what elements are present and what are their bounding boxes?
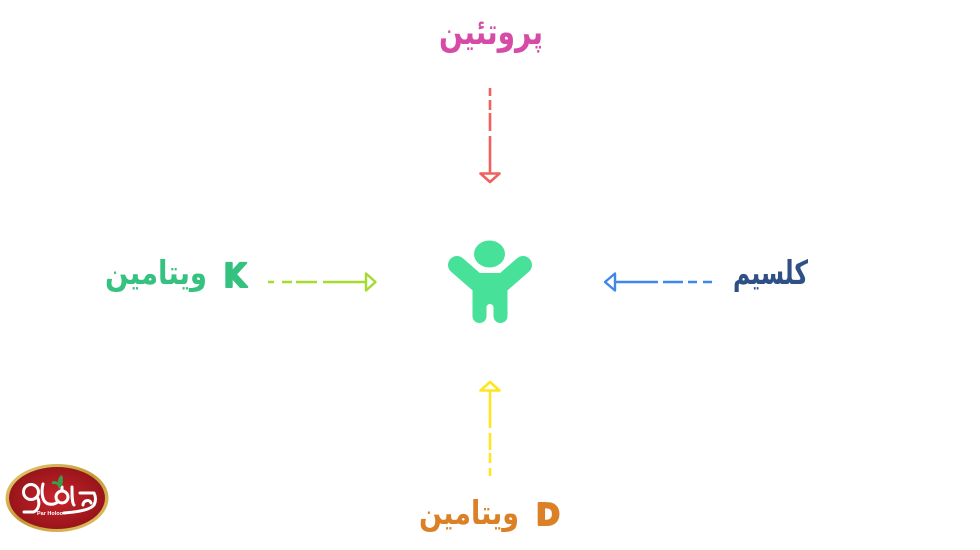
logo: green leaf	[52, 475, 63, 489]
label: vitamin K: ویتامین	[105, 253, 207, 293]
logo: oval badge	[6, 464, 108, 532]
label: protein: پروتئین	[439, 12, 543, 53]
arrow: protein down	[480, 88, 500, 182]
arrow: vitamin K right	[268, 274, 376, 290]
arrow: vitamin D up	[480, 382, 500, 476]
logo: brand mark	[24, 484, 96, 513]
label: vitamin K: K	[224, 256, 248, 295]
label: calcium: کلسیم	[733, 253, 809, 292]
arrow: calcium left	[605, 274, 712, 290]
logo: latin name: Par Holoo	[37, 511, 64, 517]
logo	[6, 464, 108, 532]
icon: child with raised arms	[457, 240, 523, 323]
label: vitamin D: ویتامین	[419, 493, 519, 533]
label: vitamin D: D	[536, 498, 560, 533]
